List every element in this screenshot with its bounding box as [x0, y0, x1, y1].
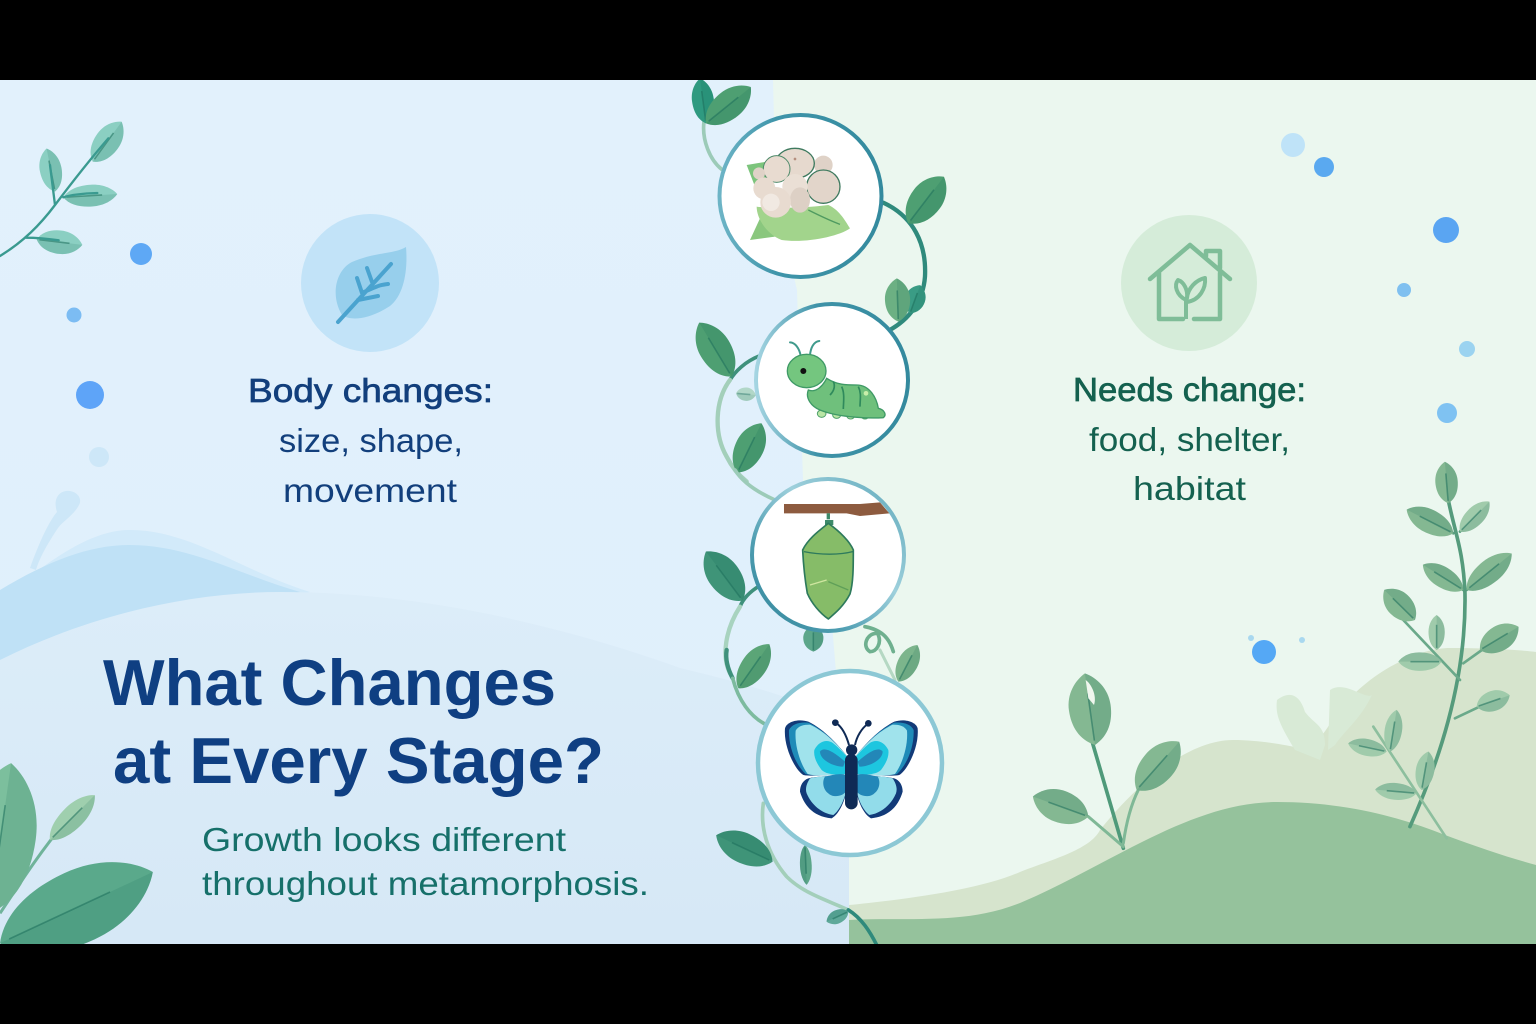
stage 4: butterfly [758, 671, 942, 855]
foliage: right plants [1027, 461, 1525, 848]
sprig: top left branch [0, 114, 132, 257]
stage 3: chrysalis [752, 479, 904, 631]
heading: title: at Every Stage? [113, 724, 604, 797]
stage 1: eggs on leaf [720, 115, 882, 277]
text block: subtitle: throughout metamorphosis. [202, 865, 649, 902]
foliage: bottom left leaves [0, 758, 168, 976]
text block: body changes: Body changes: [248, 372, 493, 409]
right panel background [773, 80, 1536, 944]
decorative dots: right side [1248, 133, 1475, 664]
vine and leaves: lower section [693, 470, 926, 945]
text block: body changes [248, 372, 493, 509]
left panel background [0, 80, 860, 944]
text block: needs change: food, shelter, [1089, 421, 1290, 458]
stage 2: caterpillar [756, 304, 908, 456]
icon: leaf badge [301, 214, 439, 352]
text block: needs change: habitat [1133, 470, 1246, 507]
left background hills [0, 530, 849, 944]
text block: subtitle: Growth looks different [202, 821, 566, 858]
text block: body changes: size, shape, [279, 422, 463, 459]
text block: body changes: movement [283, 472, 457, 509]
text block: needs change: Needs change: [1073, 371, 1306, 408]
vine and leaves: upper section [686, 76, 957, 482]
decorative dots: left side [66, 243, 152, 409]
text block: needs change [1073, 371, 1306, 507]
right background hills [849, 648, 1536, 944]
icon: house with sprout badge [1121, 215, 1257, 351]
sprig: pale faded bud [30, 447, 109, 570]
heading: title [103, 646, 604, 797]
heading: title: What Changes [103, 646, 556, 719]
text block: subtitle [202, 821, 649, 902]
